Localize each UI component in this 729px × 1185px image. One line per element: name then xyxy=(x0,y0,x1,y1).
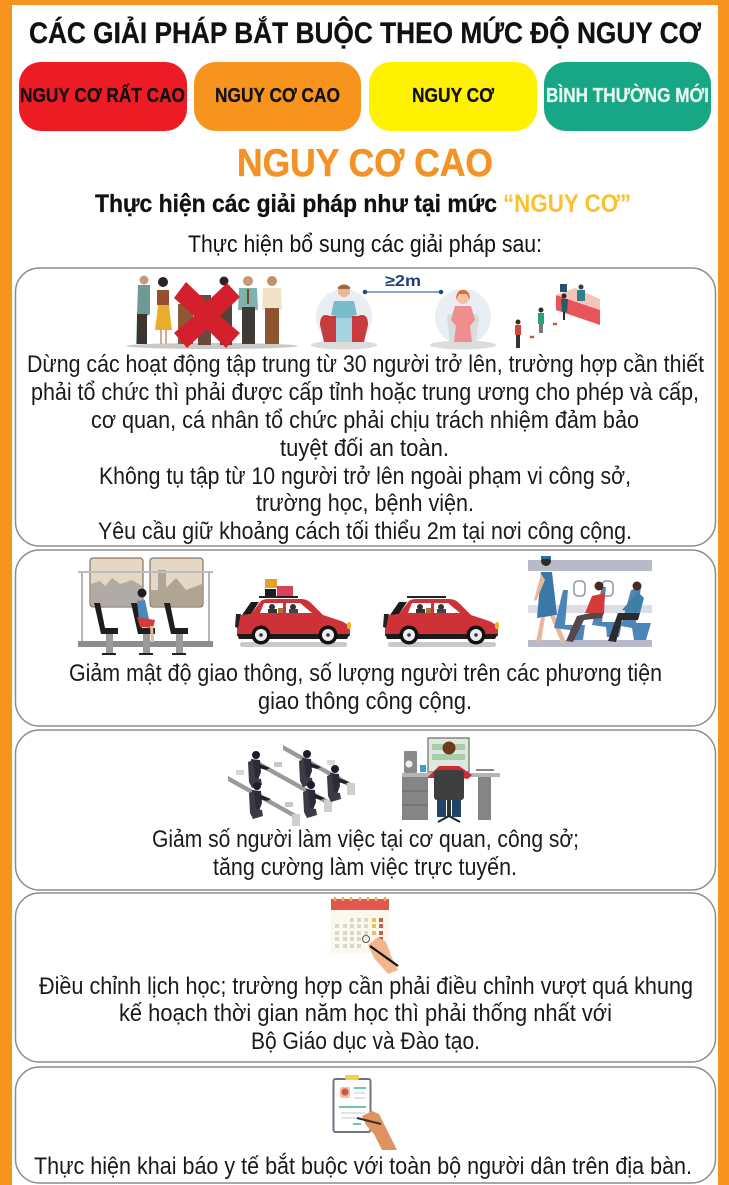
subheading: Thực hiện các giải pháp như tại mức xyxy=(95,190,497,218)
icon: bus interior xyxy=(78,558,213,655)
panel: medical declaration xyxy=(16,1067,716,1183)
icon: car with luggage xyxy=(235,579,351,647)
panel text: Bộ Giáo dục và Đào tạo. xyxy=(251,1028,480,1055)
tab: high risk: NGUY CƠ CAO xyxy=(215,85,340,107)
icon: person at computer xyxy=(402,738,500,822)
tab: very high risk: NGUY CƠ RẤT CAO xyxy=(20,84,185,107)
panel text xyxy=(69,660,662,715)
risk level tabs xyxy=(19,62,711,131)
panel text: Yêu cầu giữ khoảng cách tối thiểu 2m tại nơi công cộng. xyxy=(98,518,632,545)
icon: calendar and hand xyxy=(331,897,398,974)
panel text: tăng cường làm việc trực tuyến. xyxy=(213,854,517,881)
panel: public transport xyxy=(16,550,716,726)
panel text: Giảm mật độ giao thông, số lượng người trên các phương tiện xyxy=(69,660,662,687)
main heading: high risk: NGUY CƠ CAO xyxy=(237,142,493,185)
panel text: Không tụ tập từ 10 người trở lên ngoài phạm vi công sở, xyxy=(99,463,631,490)
tab: risk xyxy=(369,62,537,131)
panel: school schedule xyxy=(16,893,716,1062)
panel text: tuyệt đối an toàn. xyxy=(280,435,449,462)
icon: office desks xyxy=(228,745,355,826)
icon: red cross xyxy=(174,282,240,348)
tab: high risk xyxy=(194,62,361,131)
panel text xyxy=(39,973,693,1055)
panel text: giao thông công cộng. xyxy=(258,688,472,715)
icon: crowd crossed out xyxy=(126,276,298,349)
intro line: Thực hiện bổ sung các giải pháp sau: xyxy=(188,231,542,258)
icon: clipboard and hand xyxy=(334,1075,397,1150)
subheading: “NGUY CƠ” xyxy=(503,190,631,218)
icon: queue at counter xyxy=(515,284,600,348)
panel text: trường học, bệnh viện. xyxy=(256,490,474,517)
panel: workplaces xyxy=(16,730,716,890)
panel: gatherings and distancing xyxy=(16,268,716,546)
panel text: kế hoạch thời gian năm học thì phải thống nhất với xyxy=(119,1000,612,1027)
icon: car without luggage xyxy=(383,596,499,647)
icon: two metre distance xyxy=(311,273,496,350)
panel text xyxy=(27,351,704,545)
panel text xyxy=(152,826,579,881)
tab: very high risk xyxy=(19,62,187,131)
tab: risk: NGUY CƠ xyxy=(412,85,495,107)
tab: new normal xyxy=(544,62,711,131)
icon: airplane cabin xyxy=(528,556,652,647)
panel text: Giảm số người làm việc tại cơ quan, công sở; xyxy=(152,826,579,853)
label: minimum distance: ≥2m xyxy=(385,273,421,290)
panel text: cơ quan, cá nhân tổ chức phải chịu trách nhiệm đảm bảo xyxy=(91,407,639,434)
